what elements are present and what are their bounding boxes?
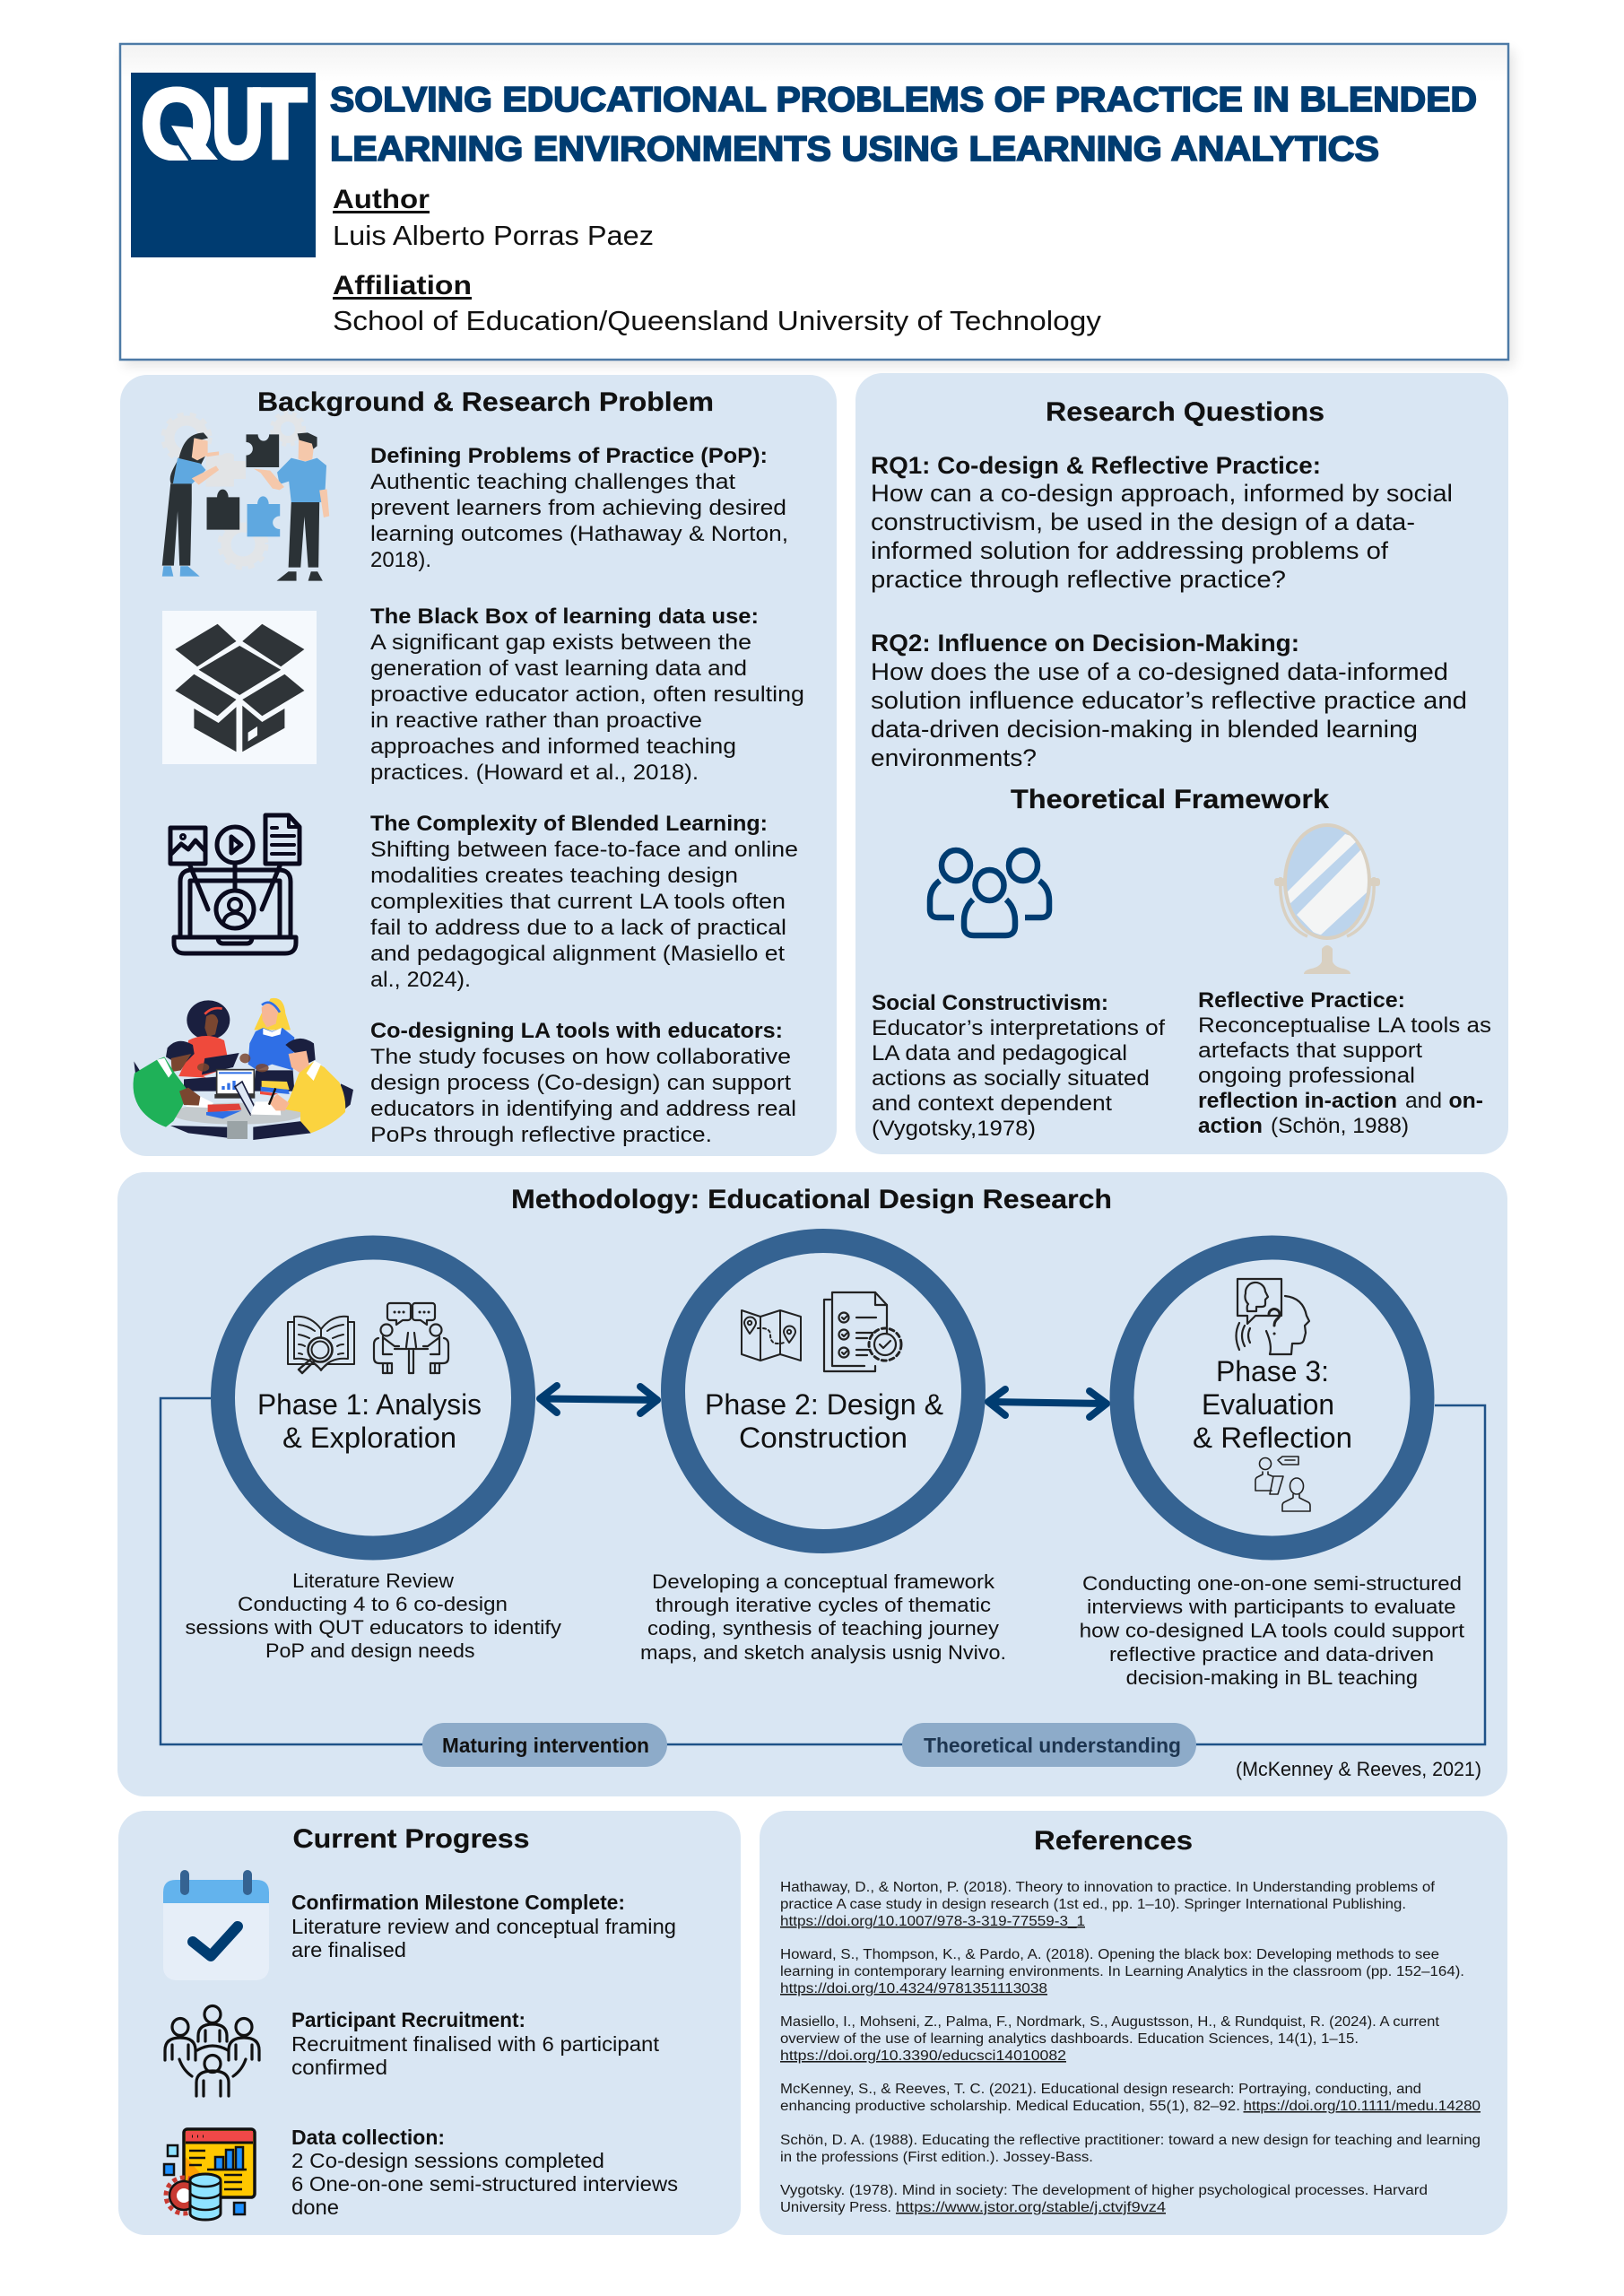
reference: Howard et al.: Howard, S., Thompson, K., & Pardo, A. (2018). Opening the black box: Developing methods to see (780, 1947, 1439, 1962)
text: phase 3 title: & Reflection (1193, 1422, 1352, 1454)
reference: Vygotsky (780, 2183, 1428, 2215)
text: social constructivism: Social Constructivism: (872, 991, 1108, 1015)
text: phase 1 description: Literature Review (292, 1570, 455, 1592)
pill: maturing intervention (422, 1723, 667, 1767)
text: phase 2 description: Developing a conceptual framework (652, 1570, 995, 1593)
text: defining problems of practice: prevent learners from achieving desired (370, 496, 786, 520)
text: participant recruitment: Recruitment finalised with 6 participant (291, 2032, 659, 2056)
text: RQ1 (871, 452, 1453, 593)
reference: Howard et al. (780, 1947, 1464, 1996)
text: phase 1 description: sessions with QUT educators to identify (185, 1616, 562, 1639)
text: reflective practice: Reflective Practice: (1198, 988, 1405, 1013)
text: black box: approaches and informed teaching (370, 735, 736, 759)
reference: Schon: Schön, D. A. (1988). Educating the reflective practitioner: toward a new design for teaching and learning (780, 2133, 1481, 2148)
text: data collection: Data collection: (291, 2126, 445, 2149)
text: participant recruitment: confirmed (291, 2056, 387, 2079)
affiliation block: School of Education/Queensland University of Technology (333, 305, 1102, 336)
logo: QUT (131, 69, 316, 257)
text: phase 3 description: interviews with participants to evaluate (1087, 1596, 1456, 1618)
icon: book and magnifier (288, 1317, 354, 1373)
phase 2 circle (673, 1241, 974, 1541)
pill: maturing intervention: Maturing intervention (442, 1734, 649, 1757)
heading: current progress: Current Progress (292, 1824, 529, 1854)
reference: Howard et al.: learning in contemporary learning environments. In Learning Analytics in the classroom (pp. 152–164). (780, 1964, 1464, 1979)
text: phase 3 description: Conducting one-on-one semi-structured (1082, 1572, 1462, 1595)
reference: Hathaway and Norton: https://doi.org/10.1007/978-3-319-77559-3_1 (780, 1914, 1085, 1929)
affiliation block: Affiliation (333, 271, 472, 300)
reference: Masiello et al.: overview of the use of learning analytics dashboards. Education Sciences, 14(1), 1–15. (780, 2031, 1359, 2047)
heading: methodology: Methodology: Educational Design Research (511, 1185, 1112, 1214)
phase 3 circle (1122, 1248, 1422, 1548)
text: confirmation milestone: Literature review and conceptual framing (291, 1915, 676, 1938)
text: complexity of blended learning: The Complexity of Blended Learning: (370, 812, 768, 836)
reference: Schon (780, 2133, 1481, 2165)
text: defining problems of practice: Defining Problems of Practice (PoP): (370, 444, 768, 468)
text: black box: The Black Box of learning data use: (370, 604, 759, 629)
text: data collection (291, 2126, 678, 2219)
text: phase 3 description: reflective practice and data-driven (1109, 1643, 1434, 1665)
text: co-designing: The study focuses on how collaborative (370, 1045, 791, 1069)
text: phase 3 title: Evaluation (1202, 1388, 1334, 1421)
logo: QUT: Q (141, 69, 213, 179)
heading: research questions: Research Questions (1046, 397, 1324, 427)
reference: Masiello et al.: https://doi.org/10.3390/educsci14010082 (780, 2048, 1066, 2064)
arrow: phase 2 to phase 3 (988, 1389, 1107, 1417)
reference: Schon: in the professions (First edition.). Jossey-Bass. (780, 2150, 1093, 2165)
text: RQ2: RQ2: Influence on Decision-Making: (871, 630, 1299, 657)
icon: meeting (374, 1303, 448, 1373)
text: defining problems of practice: learning outcomes (Hathaway & Norton, (370, 522, 788, 546)
illustration: people with puzzle pieces (162, 413, 329, 581)
panel: current progress (118, 1811, 741, 2235)
reference: Hathaway and Norton: Hathaway, D., & Norton, P. (2018). Theory to innovation to practice. In Understanding problems of (780, 1880, 1436, 1895)
text: phase 2 description (640, 1570, 1006, 1664)
text: phase 1 title (257, 1388, 482, 1454)
text: participant recruitment: Participant Recruitment: (291, 2008, 525, 2031)
reference: Vygotsky: https://www.jstor.org/stable/j.ctvjf9vz4 (896, 2200, 1166, 2215)
title: LEARNING ENVIRONMENTS USING LEARNING ANALYTICS (330, 130, 1379, 169)
reference: McKenney and Reeves (780, 2082, 1481, 2114)
text: RQ2: How does the use of a co-designed data-informed (871, 658, 1448, 685)
reference: Vygotsky: Vygotsky. (1978). Mind in society: The development of higher psychological processes. Harvard (780, 2183, 1428, 2198)
icon: checklist with gear (824, 1292, 901, 1371)
affiliation block (333, 271, 1102, 336)
logo: QUT: T (254, 69, 307, 179)
pill: theoretical understanding: Theoretical understanding (924, 1734, 1181, 1757)
text: social constructivism (872, 991, 1165, 1141)
reference: Masiello et al. (780, 2014, 1440, 2064)
text: complexity of blended learning: Shifting between face-to-face and online (370, 838, 798, 862)
reference: Howard et al.: https://doi.org/10.4324/9781351113038 (780, 1981, 1047, 1996)
text: black box: proactive educator action, often resulting (370, 683, 804, 707)
text: phase 2 description: coding, synthesis of teaching journey (647, 1617, 1000, 1639)
text: complexity of blended learning (370, 812, 798, 992)
title: SOLVING EDUCATIONAL PROBLEMS OF PRACTICE IN BLENDED (330, 81, 1477, 119)
text: reflective practice: action (1198, 1114, 1263, 1138)
text: phase 3 description: decision-making in BL teaching (1126, 1666, 1418, 1689)
reference: Vygotsky: University Press. (780, 2200, 891, 2215)
text: complexity of blended learning: and pedagogical alignment (Masiello et (370, 942, 785, 966)
text: data collection: 6 One-on-one semi-structured interviews (291, 2172, 678, 2196)
panel: research questions and theoretical framework (855, 373, 1508, 1154)
text: social constructivism: (Vygotsky,1978) (872, 1117, 1036, 1141)
text: black box: generation of vast learning data and (370, 657, 747, 681)
text: reflective practice (1198, 988, 1491, 1138)
phase 1 circle (222, 1248, 524, 1548)
text: phase 3 title (1193, 1355, 1352, 1454)
author block (333, 185, 654, 251)
text: confirmation milestone: are finalised (291, 1938, 406, 1961)
text: confirmation milestone (291, 1891, 676, 1961)
icon: group of people (930, 850, 1049, 935)
text: phase 3 title: Phase 3: (1216, 1355, 1329, 1387)
text: social constructivism: actions as socially situated (872, 1066, 1150, 1091)
arrow: phase 1 to phase 2 (540, 1386, 657, 1413)
reference: Hathaway and Norton: practice A case study in design research (1st ed., pp. 1–10). Springer International Publishing. (780, 1897, 1406, 1912)
heading: background: Background & Research Problem (257, 387, 714, 417)
text: phase 3 description (1080, 1572, 1465, 1689)
reference: Hathaway and Norton (780, 1880, 1436, 1929)
text: reflective practice: and (1405, 1089, 1442, 1113)
text: RQ1: practice through reflective practice? (871, 566, 1286, 593)
text: RQ2: environments? (871, 744, 1037, 771)
text: black box (370, 604, 804, 785)
text: reflective practice: reflection in-action (1198, 1089, 1397, 1113)
text: RQ2: data-driven decision-making in blended learning (871, 716, 1418, 743)
illustration: educators co-designing at a table (134, 998, 353, 1140)
text: black box: practices. (Howard et al., 2018). (370, 761, 699, 785)
reference: McKenney and Reeves: https://doi.org/10.1111/medu.14280 (1243, 2099, 1481, 2114)
text: reflective practice: on- (1449, 1089, 1483, 1113)
author block: Author (333, 185, 430, 214)
text: co-designing: PoPs through reflective practice. (370, 1123, 712, 1147)
text: defining problems of practice (370, 444, 788, 572)
icon: laptop with media (170, 815, 300, 953)
text: RQ1: How can a co-design approach, informed by social (871, 480, 1453, 507)
text: co-designing: design process (Co-design) can support (370, 1071, 791, 1095)
text: reflective practice: Reconceptualise LA tools as (1198, 1013, 1491, 1038)
text: data collection: done (291, 2196, 339, 2219)
text: social constructivism: Educator’s interpretations of (872, 1016, 1165, 1040)
text: complexity of blended learning: fail to address due to a lack of practical (370, 916, 786, 940)
text: data collection: 2 Co-design sessions completed (291, 2149, 604, 2172)
text: phase 1 title: Phase 1: Analysis (257, 1388, 482, 1421)
text: phase 2 title (705, 1388, 943, 1454)
text: participant recruitment (291, 2008, 659, 2079)
icon: open box (162, 611, 317, 764)
icon: map (742, 1310, 801, 1361)
title (330, 81, 1477, 169)
text: phase 2 title: Construction (739, 1422, 908, 1454)
text: phase 1 description: PoP and design needs (265, 1639, 475, 1662)
text: black box: in reactive rather than proactive (370, 709, 702, 733)
icon: calendar with check (163, 1870, 269, 1980)
text: confirmation milestone: Confirmation Milestone Complete: (291, 1891, 625, 1914)
text: RQ2: solution influence educator’s reflective practice and (871, 687, 1467, 714)
text: RQ1: RQ1: Co-design & Reflective Practice: (871, 452, 1321, 479)
panel: methodology (117, 1172, 1507, 1796)
reference: McKenney and Reeves: enhancing productive scholarship. Medical Education, 55(1), 82–92. (780, 2099, 1240, 2114)
text: phase 2 title: Phase 2: Design & (705, 1388, 943, 1421)
author block: Luis Alberto Porras Paez (333, 220, 654, 251)
text: reflective practice: (Schön, 1988) (1271, 1114, 1409, 1138)
text: RQ2 (871, 630, 1467, 771)
text: defining problems of practice: Authentic teaching challenges that (370, 470, 735, 494)
text: phase 1 title: & Exploration (282, 1422, 456, 1454)
icon: data dashboard and database (164, 2129, 255, 2220)
text: social constructivism: and context dependent (872, 1091, 1112, 1116)
panel: references (760, 1811, 1507, 2235)
text: co-designing (370, 1019, 796, 1147)
text: co-designing: educators in identifying and address real (370, 1097, 796, 1121)
text: black box: A significant gap exists between the (370, 631, 751, 655)
text: phase 1 description: Conducting 4 to 6 co-design (238, 1593, 508, 1615)
icon: head with question (1236, 1279, 1309, 1354)
text: reflective practice: artefacts that support (1198, 1039, 1422, 1063)
text: reflective practice: ongoing professional (1198, 1064, 1415, 1088)
feedback loop line (161, 1398, 1485, 1744)
pill: theoretical understanding (902, 1723, 1196, 1767)
reference: Masiello et al.: Masiello, I., Mohseni, Z., Palma, F., Nordmark, S., Augustsson, H., & Rundquist, R. (2024). A current (780, 2014, 1440, 2030)
icon: participants group (165, 2005, 259, 2096)
heading: references: References (1034, 1826, 1193, 1856)
panel: background and research problem (120, 375, 837, 1156)
text: phase 2 description: through iterative cycles of thematic (656, 1594, 991, 1616)
logo: QUT: U (212, 69, 264, 179)
text: RQ1: informed solution for addressing problems of (871, 537, 1389, 564)
text: co-designing: Co-designing LA tools with educators: (370, 1019, 783, 1043)
text: phase 2 description: maps, and sketch analysis usnig Nvivo. (640, 1641, 1006, 1664)
heading: theoretical framework: Theoretical Framework (1011, 785, 1329, 814)
text: RQ1: constructivism, be used in the design of a data- (871, 509, 1415, 535)
text: phase 3 description: how co-designed LA tools could support (1080, 1620, 1465, 1641)
citation: (McKenney & Reeves, 2021) (1236, 1758, 1481, 1780)
reference: McKenney and Reeves: McKenney, S., & Reeves, T. C. (2021). Educational design research: Portraying, conducting, and (780, 2082, 1421, 2097)
icon: mirror (1274, 825, 1380, 974)
panel: header (120, 44, 1514, 366)
text: complexity of blended learning: modalities creates teaching design (370, 864, 738, 888)
text: defining problems of practice: 2018). (370, 548, 431, 572)
text: social constructivism: LA data and pedagogical (872, 1041, 1127, 1065)
icon: interview (1255, 1457, 1310, 1511)
text: phase 1 description (185, 1570, 562, 1662)
text: complexity of blended learning: complexities that current LA tools often (370, 890, 786, 914)
text: complexity of blended learning: al., 2024). (370, 968, 471, 992)
